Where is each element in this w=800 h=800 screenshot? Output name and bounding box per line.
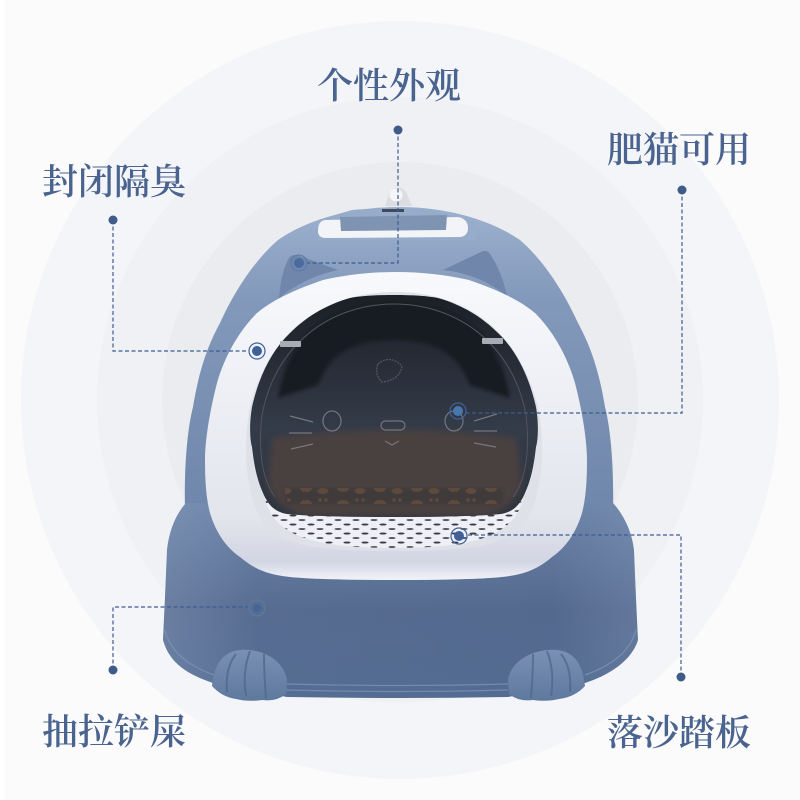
callout: 肥猫可用 (450, 130, 751, 419)
callout: 落沙踏板: 落沙踏板 (607, 713, 751, 753)
callout: 落沙踏板 (451, 528, 751, 753)
litter box product (163, 188, 638, 701)
callout: 抽拉铲屎: 抽拉铲屎 (42, 712, 186, 752)
callout: 肥猫可用: 肥猫可用 (607, 130, 751, 170)
left cat ear (279, 255, 338, 298)
cat face embossed on window (289, 359, 497, 449)
base tray (163, 503, 638, 698)
hanging loop on top (385, 188, 412, 206)
mesh litter step (264, 495, 524, 548)
tray rim line (165, 630, 636, 692)
callout: 抽拉铲屎 (42, 600, 265, 752)
callout: 封闭隔臭: 封闭隔臭 (42, 162, 186, 202)
dome cover (185, 207, 613, 510)
right cat ear (443, 251, 507, 296)
inner frame shading (246, 292, 542, 551)
roof panel (318, 208, 476, 240)
right hinge (482, 338, 503, 344)
smoked window (245, 290, 545, 522)
left hinge (280, 341, 301, 347)
top handle (318, 209, 468, 238)
callout: 个性外观: 个性外观 (317, 66, 461, 106)
right paw (508, 650, 585, 701)
white door frame (205, 272, 587, 580)
left paw (212, 650, 287, 701)
callout: 个性外观 (291, 66, 461, 271)
callout: 封闭隔臭 (42, 162, 265, 359)
